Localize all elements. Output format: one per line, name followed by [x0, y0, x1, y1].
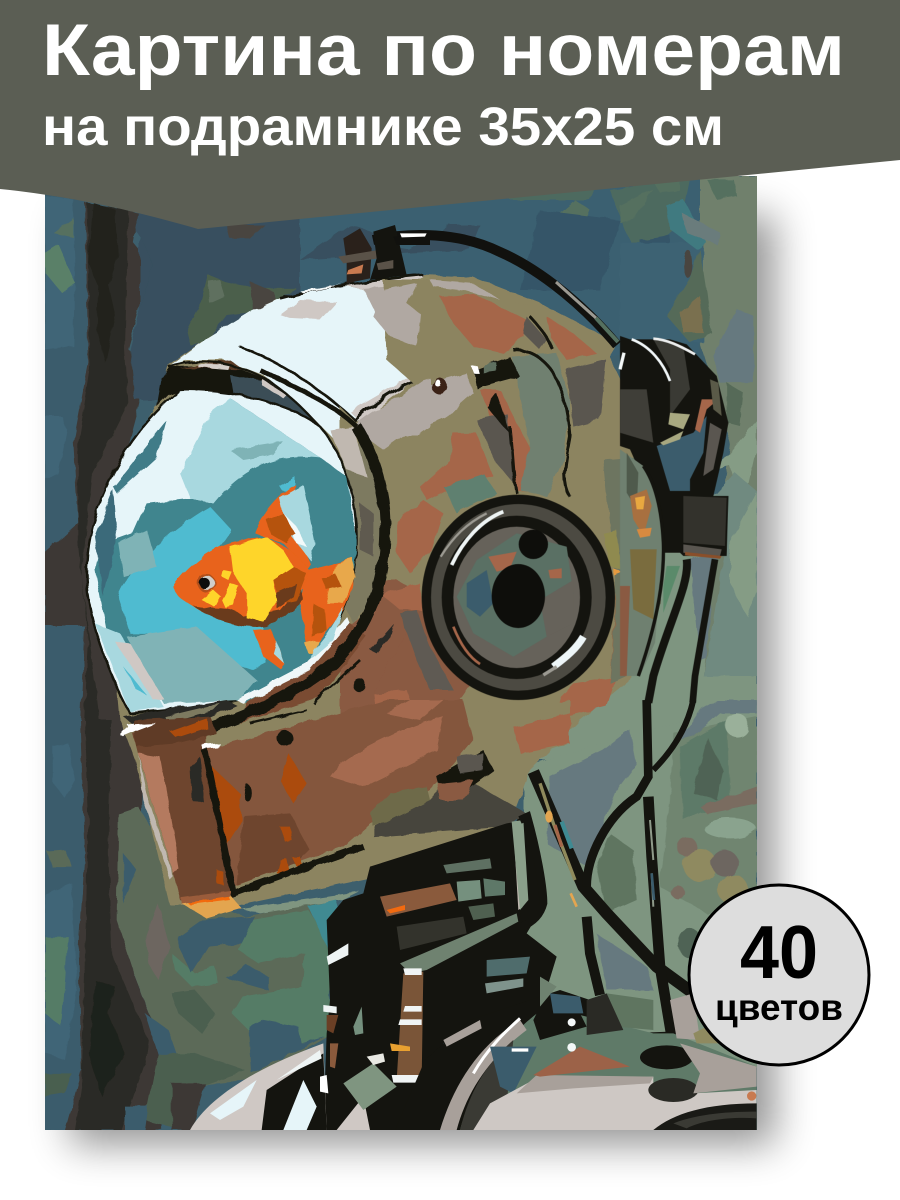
goldfish [173, 485, 355, 668]
robot neck [323, 820, 557, 1130]
robot head shell [100, 275, 662, 905]
headband and antenna [338, 225, 618, 345]
badge: 40 colours: 40 [740, 910, 818, 994]
painting [45, 176, 758, 1130]
bowl ring and goldfish bowl [87, 370, 393, 730]
cables [512, 700, 693, 1040]
title: Картина по номерам [42, 10, 845, 91]
subtitle: на подрамнике 35x25 см [42, 97, 724, 157]
canvas drop shadow [70, 215, 775, 1145]
robot chest [190, 977, 757, 1130]
robot jaw [120, 700, 570, 953]
painted background [45, 176, 758, 1130]
speaker ear [422, 495, 615, 700]
header banner [0, 0, 900, 229]
bowl glass [87, 390, 357, 713]
badge: 40 colours: цветов [715, 987, 843, 1028]
badge: 40 colours [689, 885, 869, 1065]
earpiece and connector [620, 336, 728, 703]
